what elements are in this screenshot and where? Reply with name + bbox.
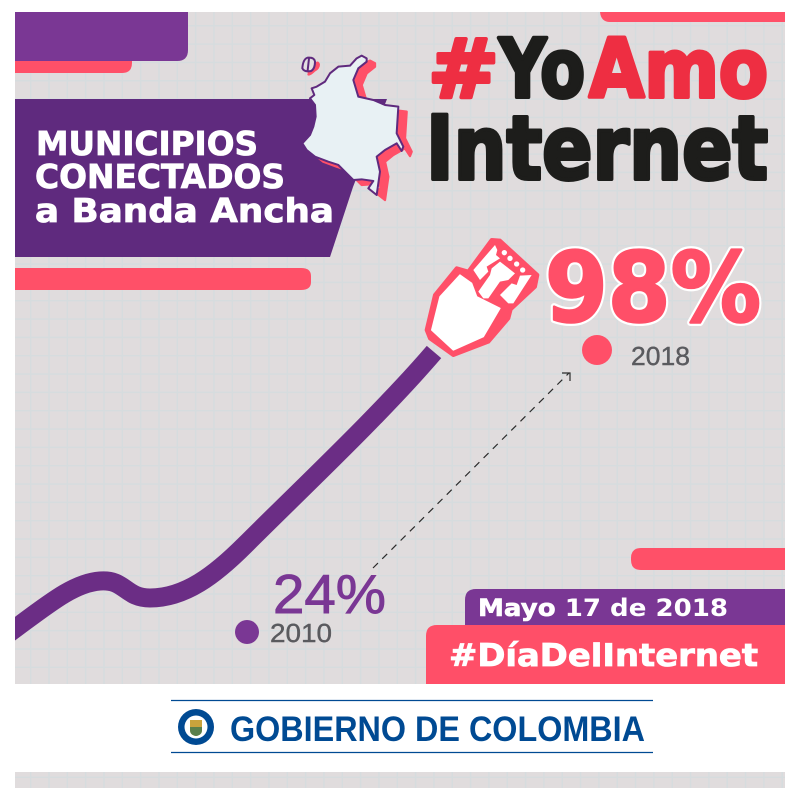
dashed arrow [373, 373, 570, 568]
hashtag banner [426, 625, 785, 684]
plug contacts [473, 245, 532, 303]
map land [302, 56, 403, 195]
hashtag text: #DíaDelInternet [449, 638, 758, 674]
purple growth line [5, 352, 434, 636]
network plug icon [427, 240, 537, 355]
98 percent value: 98% [545, 232, 761, 344]
government name: GOBIERNO DE COLOMBIA [230, 710, 645, 749]
top left coral bar [15, 50, 132, 73]
heading text: MUNICIPIOS [36, 124, 258, 163]
#YoAmo logo: Yo [498, 23, 585, 117]
top right coral bar [600, 12, 785, 22]
map of Colombia [302, 56, 412, 200]
date text: Mayo 17 de 2018 [478, 594, 728, 622]
map shadow [311, 61, 412, 200]
heading text: CONECTADOS [35, 157, 285, 196]
2010 label: 2010 [270, 618, 332, 648]
98 percent value: 98% [545, 232, 761, 344]
plug white casing [432, 275, 500, 350]
coral bar below heading [15, 268, 311, 290]
heading panel [15, 99, 387, 257]
plug outline [427, 240, 537, 355]
24 percent value: 24% [273, 563, 386, 625]
2018 marker dot [582, 335, 612, 365]
coat of arms seal [178, 709, 214, 745]
government logo [171, 700, 653, 752]
#YoAmo logo: # [428, 23, 499, 117]
map islands shadow [307, 62, 320, 76]
map islands [302, 58, 315, 71]
lower background strip [15, 772, 785, 788]
#YoAmo logo [426, 23, 768, 200]
heading text: a Banda Ancha [35, 191, 334, 230]
2018 label: 2018 [631, 341, 690, 371]
heading text [35, 124, 334, 230]
top left purple block [15, 12, 188, 61]
#YoAmo logo: Amo [589, 23, 768, 117]
2010 marker dot [235, 620, 259, 644]
date banner [465, 589, 785, 625]
lower right coral bar [631, 548, 785, 570]
